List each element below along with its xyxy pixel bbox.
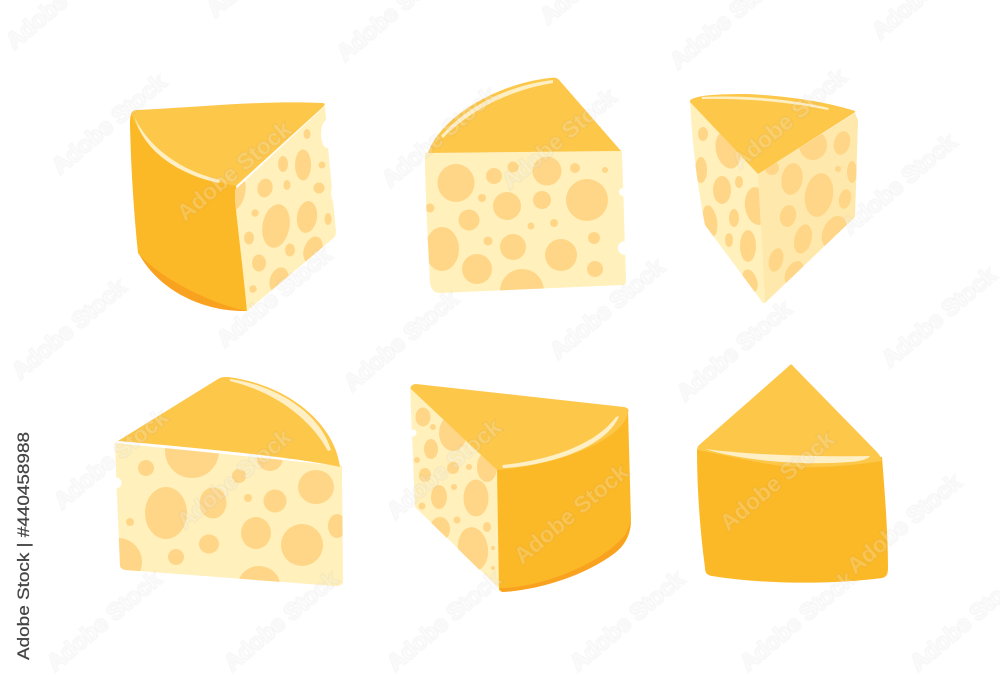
cheese wedge 3: top-right, point down	[690, 94, 858, 303]
watermark pattern: Adobe Stock	[715, 425, 839, 536]
top face	[132, 102, 325, 186]
stock id caption: Adobe Stock | #440458988	[14, 432, 33, 660]
left holes	[696, 127, 761, 292]
cheese wedge 4: bottom-left, front cut face	[115, 377, 343, 586]
rind front	[697, 449, 888, 583]
rind side	[497, 410, 631, 592]
cheese wedge 6: bottom-right, rind front	[697, 364, 888, 583]
top face	[690, 94, 855, 174]
watermark pattern: Adobe Stock	[735, 565, 859, 675]
watermark pattern: Adobe Stock	[565, 565, 689, 675]
watermark pattern: Adobe Stock	[212, 241, 336, 352]
cut face	[425, 151, 626, 293]
top face	[411, 384, 629, 470]
watermark pattern: Adobe Stock	[42, 565, 166, 675]
cut face	[115, 443, 343, 586]
watermark pattern: Adobe Stock	[497, 83, 621, 194]
watermark pattern: Adobe Stock	[837, 128, 961, 239]
rind side	[130, 112, 247, 311]
watermark pattern: Adobe Stock	[172, 423, 296, 534]
watermark pattern: Adobe Stock	[509, 458, 633, 569]
watermark pattern: Adobe Stock	[49, 403, 173, 514]
cheese wedge 5: bottom-centre, holes left and rind right	[410, 384, 631, 592]
highlight	[705, 449, 870, 463]
rind shadow	[139, 254, 247, 311]
holes	[235, 120, 333, 293]
watermark pattern: Adobe Stock	[172, 115, 296, 226]
highlight	[135, 118, 220, 183]
cheese wedge 1: top-left, rind left and holes right	[130, 102, 339, 311]
top face	[428, 78, 621, 153]
right holes	[765, 129, 857, 288]
highlight	[702, 96, 829, 110]
watermark pattern: Adobe Stock	[339, 285, 463, 396]
watermark pattern: Adobe Stock	[877, 261, 1000, 372]
watermark pattern: Adobe Stock	[47, 68, 171, 179]
watermark pattern: Adobe Stock	[377, 81, 501, 192]
right cut face	[758, 113, 858, 303]
holes	[116, 448, 343, 582]
left cut face	[690, 102, 765, 303]
highlight	[230, 379, 331, 451]
top face	[697, 364, 882, 467]
watermark pattern: Adobe Stock	[382, 413, 506, 524]
holes	[410, 408, 497, 573]
cut face	[410, 386, 501, 590]
watermark pattern: Adobe Stock	[842, 468, 966, 579]
watermark pattern: Adobe Stock	[545, 253, 669, 364]
watermark pattern: Adobe Stock	[382, 565, 506, 675]
top face	[118, 377, 340, 467]
holes	[426, 156, 626, 290]
rind shadow	[499, 522, 631, 592]
watermark pattern: Adobe Stock	[219, 565, 343, 675]
watermark pattern: Adobe Stock	[7, 273, 131, 384]
watermark pattern: Adobe Stock	[727, 63, 851, 174]
highlight	[441, 80, 553, 138]
highlight	[502, 416, 619, 468]
watermark pattern: Adobe Stock	[672, 295, 796, 406]
cut face	[235, 106, 336, 311]
cheese wedge 2: top-centre, front cut face	[425, 78, 626, 293]
